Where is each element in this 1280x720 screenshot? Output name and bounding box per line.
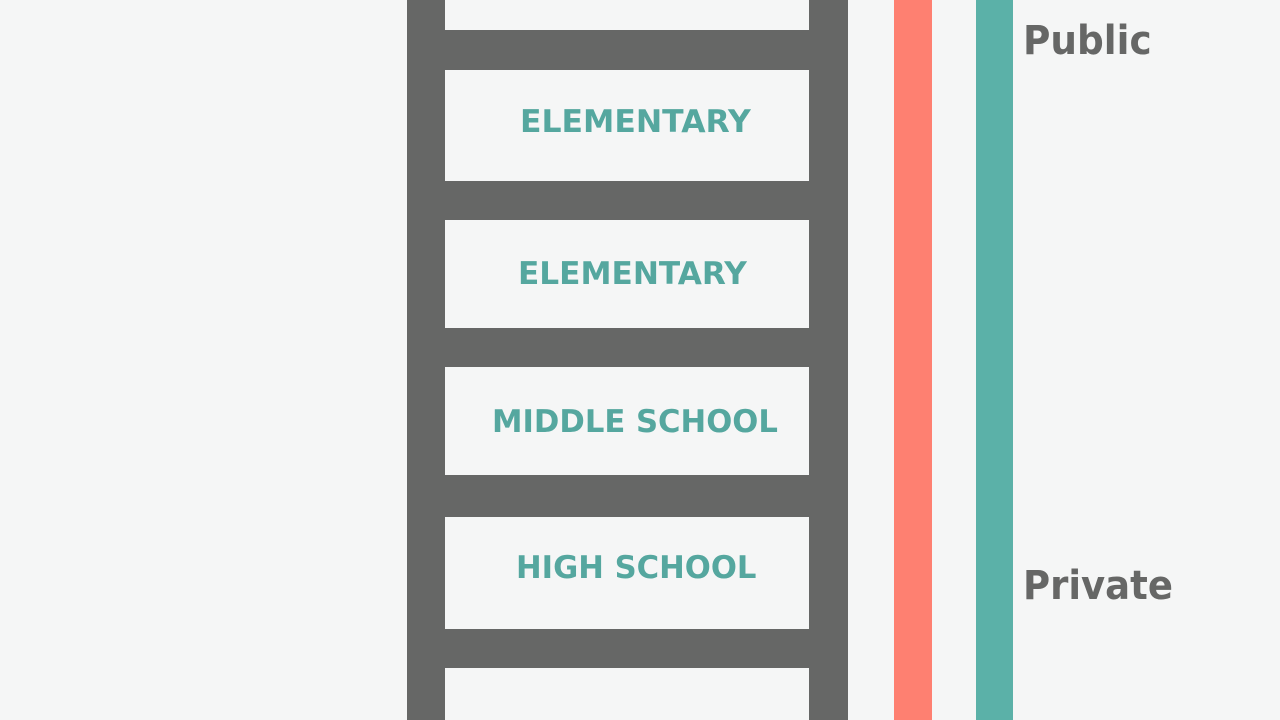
rung box: bottom partial bbox=[445, 668, 809, 720]
rung box: elementary 1 bbox=[445, 70, 809, 181]
rung box: middle school bbox=[445, 367, 809, 475]
label: private: Private bbox=[1023, 563, 1173, 609]
label: middle school: MIDDLE SCHOOL bbox=[492, 404, 778, 440]
rung box: high school bbox=[445, 517, 809, 629]
label: elementary 1: ELEMENTARY bbox=[520, 104, 751, 140]
label: high school: HIGH SCHOOL bbox=[516, 550, 756, 586]
label: public: Public bbox=[1023, 18, 1152, 64]
rung box: elementary 2 bbox=[445, 220, 809, 328]
rung box: top partial bbox=[445, 0, 809, 30]
bar: coral path bbox=[894, 0, 932, 720]
bar: teal path bbox=[976, 0, 1013, 720]
ladder bbox=[407, 0, 848, 720]
label: elementary 2: ELEMENTARY bbox=[518, 256, 747, 292]
